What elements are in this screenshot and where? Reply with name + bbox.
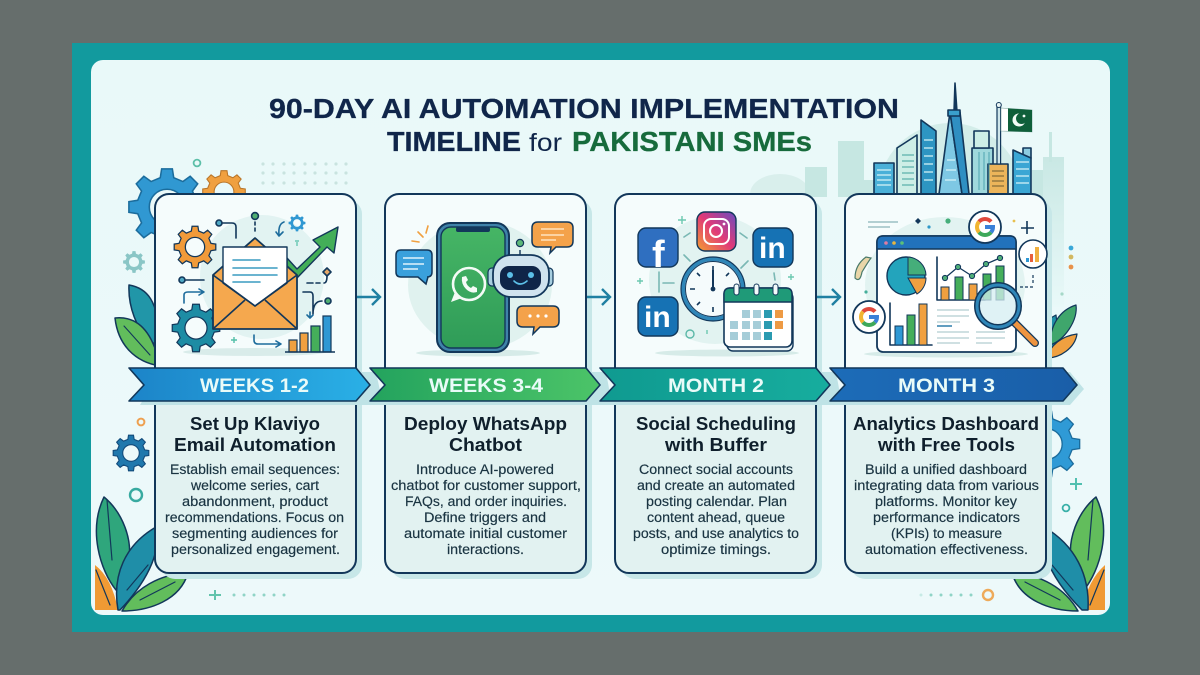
text: card 2: chatbot for customer support, [391, 478, 581, 493]
text: card 1 [165, 413, 344, 557]
text: card 4: Analytics Dashboard [853, 413, 1039, 434]
icon: Pakistan flag [996, 102, 1032, 164]
text: card 1: welcome series, cart [190, 478, 319, 493]
text: card 2: interactions. [447, 542, 524, 557]
text: card 1: abandonment, product [182, 494, 328, 509]
text: card 4 [853, 413, 1039, 557]
pie chart [887, 257, 926, 295]
text: card 2: Chatbot [449, 434, 522, 455]
text: card 3: Connect social accounts [639, 462, 793, 477]
icon: facebook tile [638, 228, 678, 276]
inner light panel [91, 60, 1110, 615]
browser window [877, 236, 1016, 352]
title: TIMELINE [387, 126, 521, 157]
text: card 2: automate initial customer [404, 526, 568, 541]
lower bar chart [890, 303, 932, 345]
decorative dot grid [261, 162, 348, 185]
text: card 1: personalized engagement. [171, 542, 340, 557]
arrow: card 3 to card 4 [817, 289, 840, 305]
gear: large blue [129, 169, 205, 245]
icon: instagram tile [697, 212, 736, 251]
icon: linkedin tile upper: in [759, 232, 786, 265]
small decorative accents [130, 246, 1082, 600]
gear: orange [203, 171, 245, 213]
icon: clock [681, 257, 745, 321]
card 4 [845, 194, 1052, 579]
banner: month 2 [600, 368, 842, 405]
leaves: left bottom [95, 497, 188, 611]
icon: linkedin tile upper [753, 228, 793, 267]
leaves: left mid [115, 285, 160, 366]
text: card 1: Set Up Klaviyo [190, 413, 320, 434]
card 1 [155, 194, 362, 579]
chart badge [1019, 240, 1047, 268]
icon: calendar [724, 284, 793, 351]
gear: pale teal [123, 251, 145, 273]
skyline buildings [874, 83, 1031, 195]
icon: linkedin tile lower: in [644, 301, 671, 334]
text: card 2: Deploy WhatsApp [404, 413, 567, 434]
banner: month 3: MONTH 3 [898, 375, 995, 397]
text: card 3 [633, 413, 799, 557]
text: card 3: posts, and use analytics to [633, 526, 799, 541]
gear: small dark blue [113, 435, 149, 471]
text: card 1: Establish email sequences: [170, 462, 340, 477]
text: card 2: Introduce AI-powered [416, 462, 554, 477]
title: for [529, 129, 562, 157]
google badge lower [853, 301, 885, 333]
banner: month 2: MONTH 2 [668, 375, 764, 397]
teal frame [72, 43, 1128, 632]
text: card 2: FAQs, and order inquiries. [405, 494, 567, 509]
title: 90-DAY AI AUTOMATION IMPLEMENTATION [269, 93, 899, 124]
banner: month 3 [830, 368, 1084, 405]
banner: weeks 3-4 [370, 368, 612, 405]
line and bar chart [937, 255, 1004, 300]
banner: weeks 1-2: WEEKS 1-2 [200, 375, 309, 397]
arrow: card 2 to card 3 [587, 289, 610, 305]
leaves: right bottom [1012, 497, 1105, 611]
title: PAKISTANI SMEs [572, 126, 812, 157]
text: card 4: platforms. Monitor key [875, 494, 1017, 509]
google badge top [969, 211, 1001, 243]
text: card 3: and create an automated [637, 478, 795, 493]
text: card 2: Define triggers and [424, 510, 546, 525]
arrow: card 1 to card 2 [357, 289, 380, 305]
text: card 1: recommendations. Focus on [165, 510, 344, 525]
text: card 3: with Buffer [664, 434, 767, 455]
text: card 3: optimize timings. [661, 542, 771, 557]
text: card 1: segmenting audiences for [172, 526, 339, 541]
text: card 4: (KPIs) to measure [891, 526, 1002, 541]
text: card 3: Social Scheduling [636, 413, 796, 434]
text: card 4: with Free Tools [877, 434, 1015, 455]
icon: facebook tile: f [652, 234, 665, 276]
text: card 3: content ahead, queue [647, 510, 785, 525]
ring accent top left [194, 160, 200, 166]
banner: weeks 1-2 [129, 368, 383, 405]
icon: whatsapp chatbot illustration [396, 221, 573, 356]
text: card 2 [391, 413, 581, 557]
icon: analytics dashboard illustration [853, 211, 1047, 358]
gear: right blue [1014, 411, 1080, 477]
icon: social scheduling illustration [637, 212, 799, 356]
text: card 4: Build a unified dashboard [865, 462, 1027, 477]
text: card 1: Email Automation [174, 434, 336, 455]
icon: linkedin tile lower [638, 297, 678, 336]
text: card 4: performance indicators [873, 510, 1020, 525]
banner: weeks 3-4: WEEKS 3-4 [429, 375, 543, 397]
card 3 [615, 194, 822, 579]
pale background skyline [750, 123, 1064, 307]
text: card 4: automation effectiveness. [865, 542, 1028, 557]
magnifier [977, 285, 1035, 343]
text: card 3: posting calendar. Plan [646, 494, 787, 509]
text: card 4: integrating data from various [854, 478, 1039, 493]
icon: email automation illustration [172, 213, 338, 356]
card 2 [385, 194, 592, 579]
title [269, 93, 899, 157]
leaves: right mid [1047, 305, 1077, 358]
